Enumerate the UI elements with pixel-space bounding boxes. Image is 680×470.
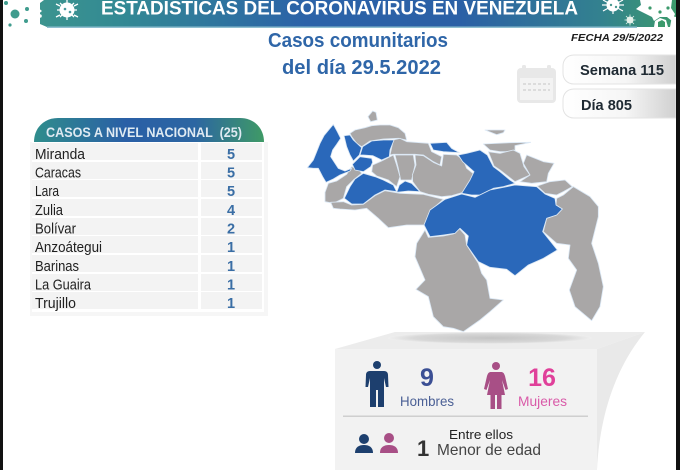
table rows: 1 (227, 259, 235, 275)
table rows: 5 (227, 147, 235, 163)
panel: demographics (335, 332, 645, 470)
table rows: Bolívar (35, 222, 76, 238)
table rows: Caracas (35, 166, 81, 182)
table rows: 2 (227, 222, 235, 238)
male label: Hombres (400, 393, 454, 409)
map of Venezuela (307, 111, 603, 332)
panel side (597, 332, 645, 470)
table rows: 1 (227, 296, 235, 312)
table rows: 4 (227, 203, 235, 219)
table rows: Trujillo (35, 296, 76, 312)
minors text: Entre ellos (449, 427, 514, 442)
date label: FECHA 29/5/2022 (571, 32, 663, 44)
table rows: 1 (227, 278, 235, 294)
panel front (335, 349, 597, 470)
table rows: 5 (227, 184, 235, 200)
icon: woman (484, 362, 508, 409)
table rows: Lara (35, 184, 60, 200)
western states (307, 111, 475, 228)
table rows: 1 (227, 240, 235, 256)
icon: calendar (517, 65, 556, 103)
minors text: 1 (417, 436, 429, 461)
table rows: Anzoátegui (35, 240, 102, 256)
minors text: Menor de edad (437, 442, 541, 459)
icon: white virus right (602, 0, 624, 14)
heading: casos comunitarios (268, 30, 448, 79)
pill: semana (563, 55, 676, 84)
header banner (40, 0, 676, 28)
icon: large white virus right (636, 0, 676, 27)
icon: man (366, 361, 388, 407)
pill: dia (563, 89, 676, 118)
table header: CASOS A NIVEL NACIONAL (25) (46, 124, 242, 140)
table rows: 5 (227, 166, 235, 182)
panel top (335, 332, 645, 349)
heading: casos comunitarios: del día 29.5.2022 (282, 57, 441, 79)
eastern states (415, 130, 603, 332)
panel: casos a nivel nacional (30, 118, 268, 316)
table rows: Barinas (35, 259, 79, 275)
icon: small white virus right (624, 14, 636, 26)
pill: semana: Semana 115 (580, 62, 664, 79)
pill: dia: Día 805 (581, 97, 632, 114)
icon: white virus left (56, 0, 78, 20)
table rows (32, 143, 262, 312)
female label: Mujeres (518, 393, 567, 409)
minors text (417, 427, 541, 461)
female count: 16 (528, 364, 556, 392)
table rows: Miranda (35, 147, 86, 163)
icon: large white virus left (3, 0, 47, 27)
map shadow (388, 332, 592, 344)
icon: minors (355, 433, 398, 453)
table rows: Zulia (35, 203, 64, 219)
table rows: La Guaira (35, 278, 92, 294)
heading: casos comunitarios: Casos comunitarios (268, 30, 448, 52)
table header (34, 118, 264, 142)
male count: 9 (420, 364, 434, 392)
